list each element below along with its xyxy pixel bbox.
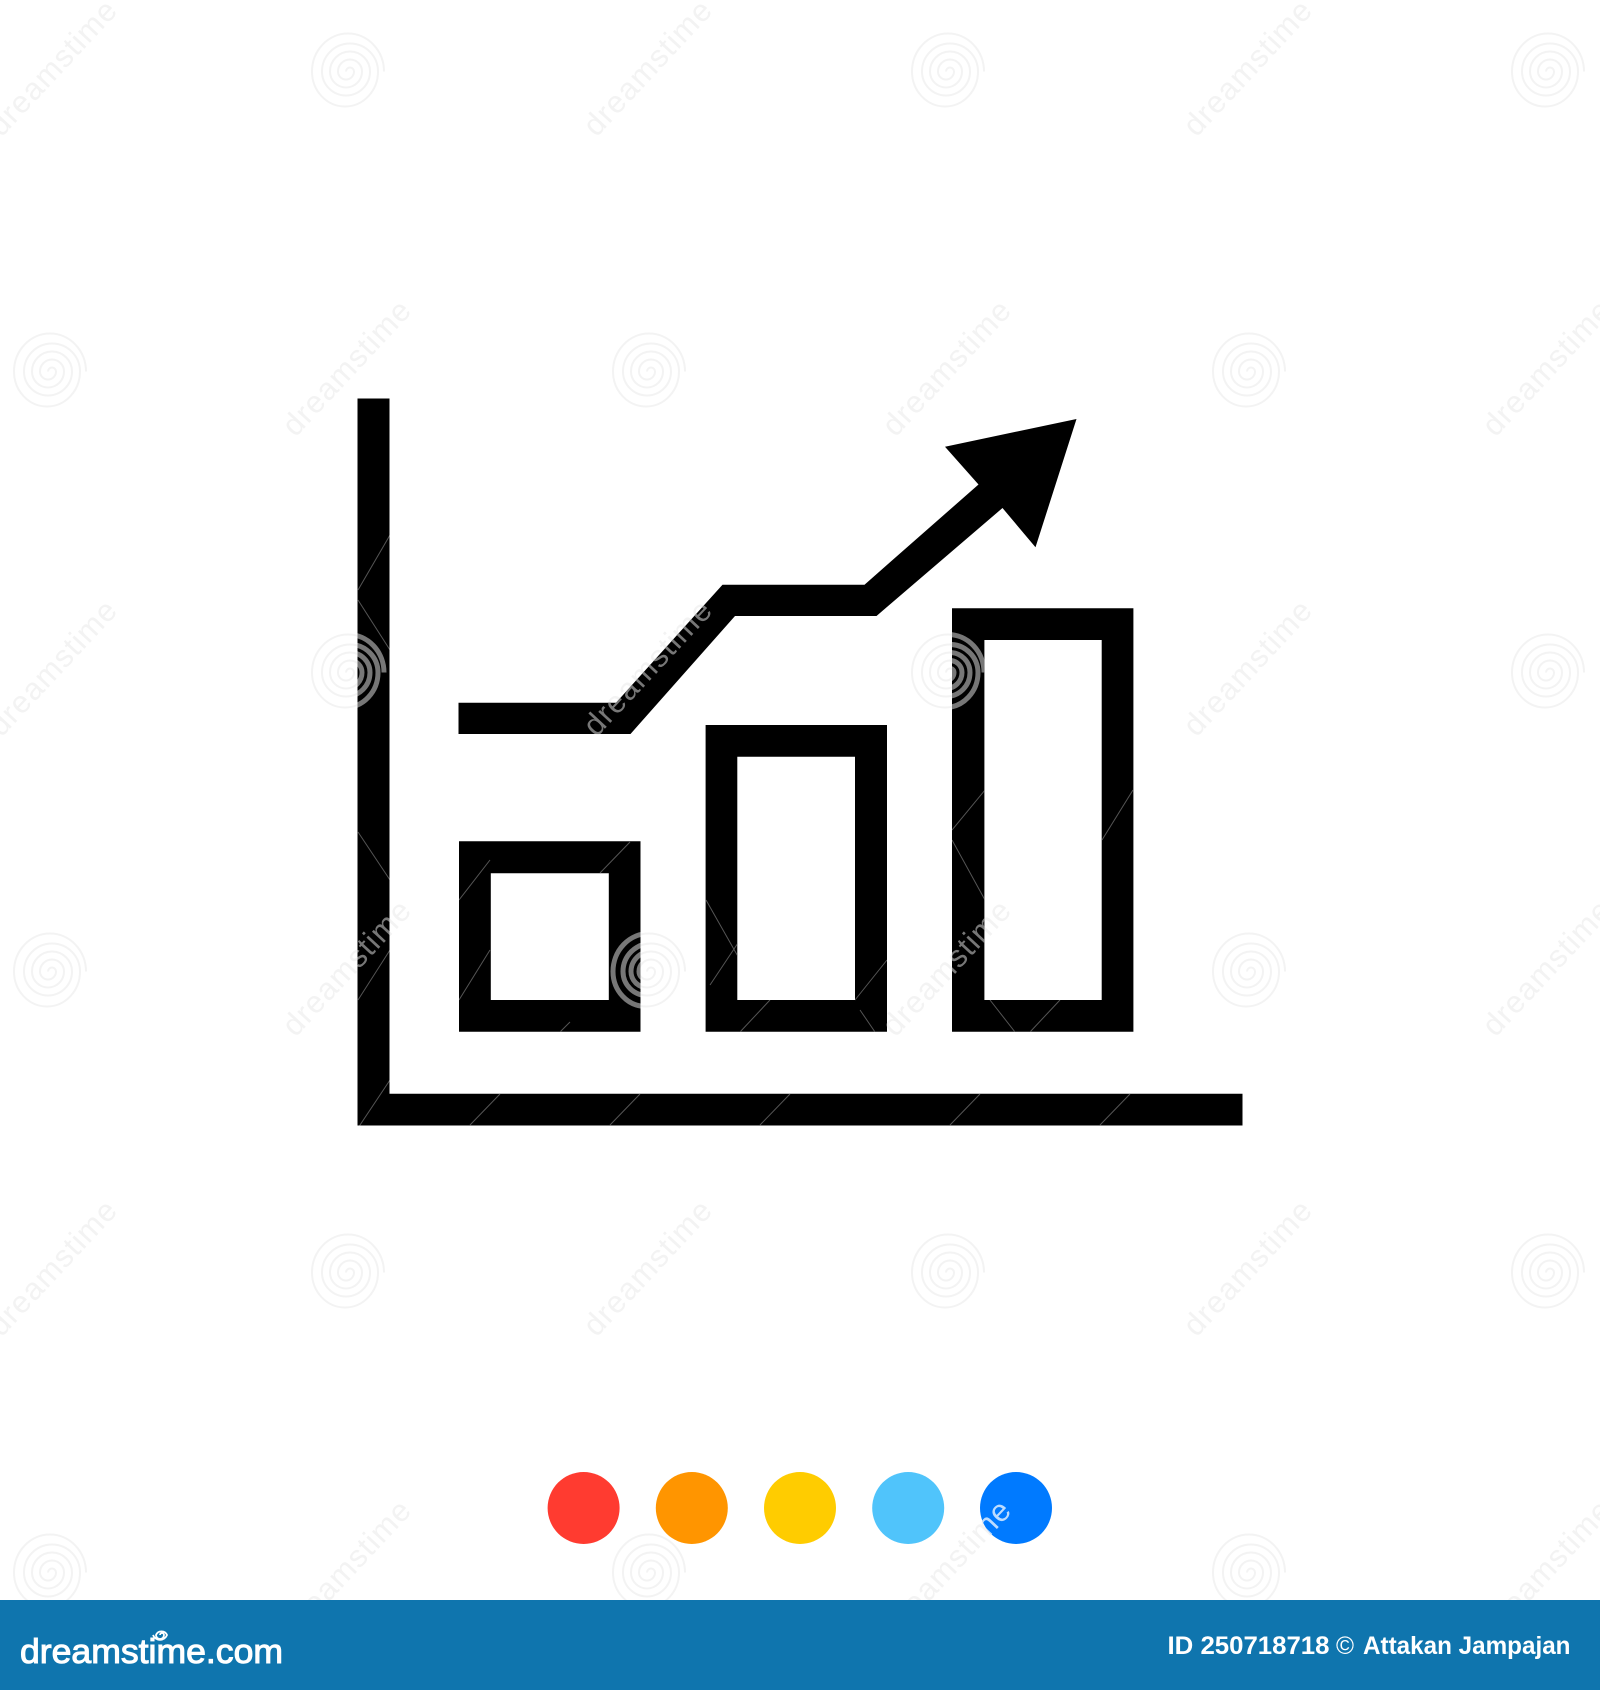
- swatch: red: [548, 1472, 620, 1544]
- chart axes: [358, 398, 1242, 1126]
- watermark pattern: dreamstime: [576, 1193, 719, 1343]
- swatch: orange: [656, 1472, 728, 1544]
- watermark over icon: dreamstime: [576, 593, 719, 743]
- watermark pattern: dreamstime: [875, 893, 1018, 1043]
- watermark pattern: dreamstime: [875, 293, 1018, 443]
- trend arrow: [458, 419, 1076, 734]
- watermark pattern: dreamstime: [275, 1493, 418, 1643]
- footer bar: [0, 1600, 1600, 1690]
- watermark pattern: dreamstime: [275, 293, 418, 443]
- watermark pattern: dreamstime: [576, 593, 719, 743]
- image id and credit: ©: [1336, 1632, 1355, 1660]
- image id and credit: ID 250718718: [1168, 1632, 1330, 1660]
- bar: tall: [952, 608, 1133, 1032]
- watermark over icon: [275, 535, 1133, 1128]
- watermark pattern: dreamstime: [1176, 1193, 1319, 1343]
- image id and credit: [1168, 1632, 1570, 1660]
- image id and credit: Attakan Jampajan: [1363, 1632, 1570, 1660]
- bar: short: [459, 841, 640, 1032]
- watermark pattern: dreamstime: [275, 893, 418, 1043]
- colour swatches: [548, 1472, 1052, 1544]
- logo spiral: [153, 1631, 167, 1640]
- swatch: light blue: [872, 1472, 944, 1544]
- swatch: yellow: [764, 1472, 836, 1544]
- watermark pattern: dreamstime: [875, 1493, 1018, 1643]
- watermark over icon: dreamstime: [275, 893, 418, 1043]
- swatch: blue: [980, 1472, 1052, 1544]
- bar: medium: [706, 725, 887, 1032]
- watermark on blue swatch: dreamstime: [875, 1493, 1018, 1643]
- watermark pattern: dreamstime: [1176, 593, 1319, 743]
- watermark over icon: dreamstime: [875, 893, 1018, 1043]
- icon: growth chart: [358, 398, 1242, 1126]
- footer logo: dreamstime.com: [20, 1633, 283, 1671]
